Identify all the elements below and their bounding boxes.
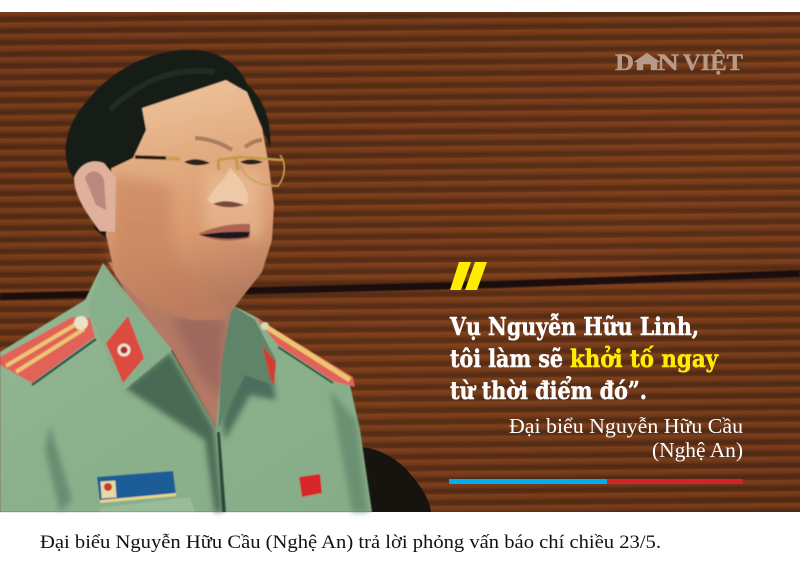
logo: Dân Việt: D bbox=[615, 50, 634, 75]
neck bbox=[108, 262, 258, 428]
mouth bbox=[198, 224, 250, 241]
head and face bbox=[66, 50, 284, 320]
nose bbox=[207, 168, 248, 206]
logo: Dân Việt: VIỆT bbox=[683, 50, 743, 75]
icon: quotation mark bbox=[450, 262, 487, 290]
ear bbox=[74, 160, 116, 232]
flag badge bbox=[299, 474, 322, 497]
attribution: (Nghệ An) bbox=[652, 438, 743, 462]
hair bbox=[66, 50, 270, 178]
glasses bbox=[135, 155, 284, 186]
quote text: tôi làm sẽ bbox=[450, 344, 563, 373]
quote block bbox=[449, 262, 744, 484]
hair behind ear bbox=[72, 160, 125, 245]
left collar bbox=[88, 263, 172, 392]
attribution bbox=[509, 414, 744, 462]
right collar bbox=[218, 305, 276, 430]
person in background: dark hair bbox=[360, 447, 431, 512]
face skin bbox=[106, 80, 274, 320]
left collar tab bbox=[106, 316, 144, 383]
logo: Dân Việt bbox=[615, 50, 743, 75]
name tag bbox=[97, 471, 176, 503]
eyebrows bbox=[195, 138, 262, 150]
quote text: Vụ Nguyễn Hữu Linh, bbox=[449, 312, 699, 341]
caption: Đại biểu Nguyễn Hữu Cầu (Nghệ An) trả lời phỏng vấn báo chí chiều 23/5. bbox=[40, 532, 661, 553]
eyes bbox=[184, 159, 263, 165]
quote text: khởi tố ngay bbox=[570, 344, 719, 373]
left epaulette bbox=[0, 316, 96, 385]
quote text bbox=[449, 312, 719, 405]
right epaulette bbox=[255, 317, 355, 387]
uniform shirt bbox=[0, 263, 372, 512]
attribution: Đại biểu Nguyễn Hữu Cầu bbox=[509, 414, 744, 438]
portrait of delegate bbox=[0, 50, 372, 512]
shirt shadows and folds bbox=[45, 352, 368, 512]
quote text: từ thời điểm đó”. bbox=[450, 376, 647, 405]
logo: Dân Việt: N bbox=[657, 50, 679, 75]
divider bar bbox=[449, 479, 743, 484]
